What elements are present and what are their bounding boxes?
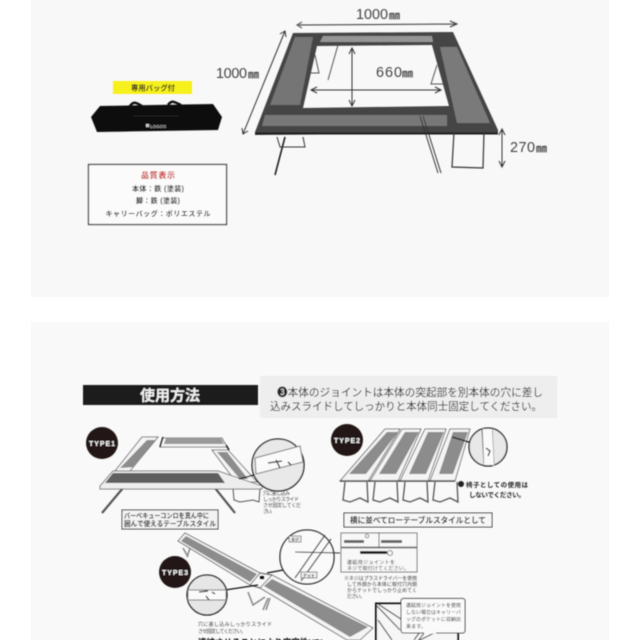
- detail circle: type 1 joint: [239, 439, 304, 491]
- dimension: depth 1000: [216, 31, 286, 134]
- label: bag included: 専用バッグ付: [131, 82, 175, 92]
- illustration: type 1 table: [100, 437, 262, 513]
- dimension: height 270: ㎜: [536, 143, 547, 155]
- note: screw fastening: ※ネジはプラスドライバーを使用: [344, 575, 417, 582]
- note: do not use as chair: 椅子としての使用は: [466, 480, 528, 489]
- note: screw fastening: からナットでしっかり止めてく: [347, 587, 417, 594]
- heading: usage: 使用方法: [140, 386, 200, 404]
- dimension: width 1000: 1000: [356, 7, 388, 23]
- detail circle: type 2 joint: [452, 428, 507, 466]
- icon: carry bag: [91, 102, 222, 132]
- instruction note: ❸本体のジョイントは本体の突起部を別本体の穴に差し: [277, 385, 543, 399]
- dimension: height 270: 270: [510, 140, 535, 156]
- quality label box: [88, 164, 226, 224]
- dimension: opening 660: ㎜: [402, 68, 413, 80]
- callout: storing the joint: しない場合はキャリーバ: [406, 609, 461, 616]
- note: do not use as chair: [458, 480, 528, 499]
- joint parts boxes: [341, 533, 417, 572]
- callout: storing the joint: 連結用ジョイントを使用: [406, 602, 461, 609]
- label: type 1 style: バーベキューコンロを真ん中に: [124, 511, 209, 520]
- label: type 1 style: 囲んで使えるテーブルスタイル: [124, 519, 216, 528]
- badge: TYPE2: TYPE2: [334, 438, 360, 445]
- caption: type 1 joint: しっかりスライド: [263, 496, 299, 503]
- note: screw fastening: ださい。: [347, 593, 365, 600]
- detail circle: type 3 slide joint: [187, 575, 258, 615]
- caption: type 3 joint: [198, 621, 272, 635]
- label: type 2 style: [344, 513, 492, 527]
- caption: type 1 joint: させ固定してくだ: [263, 502, 301, 509]
- dimension: depth 1000: 1000: [216, 66, 247, 82]
- badge: TYPE1: [86, 427, 118, 459]
- dimension: height 270: [499, 129, 547, 167]
- photo frame: bag pocket: [376, 604, 458, 640]
- instruction note: 込みスライドしてしっかりと本体同士固定してください。: [270, 399, 542, 413]
- caption: type 1 joint: さい。: [263, 508, 275, 515]
- caption: type 1 joint: 穴に差し込み: [263, 490, 290, 497]
- dimension: width 1000: ㎜: [389, 10, 400, 22]
- specifications content: [88, 7, 547, 224]
- quality label box: 脚：鉄 (塗装): [136, 196, 180, 205]
- joint parts boxes: ネジで取付けてください。: [347, 565, 409, 572]
- panel: usage: [31, 322, 609, 640]
- note: screw fastening: して外側から本体に取付穴内側: [347, 581, 417, 588]
- dimension: opening 660: 660: [376, 65, 402, 81]
- table photo: [255, 32, 498, 175]
- caption: type 3 joint: 穴に差し込みしっかりスライド: [198, 621, 272, 628]
- dimension: depth 1000: ㎜: [248, 69, 259, 81]
- caption: type 3 joint: させ固定してください。: [198, 628, 246, 635]
- label: bag included: [113, 81, 192, 94]
- note: do not use as chair: しないでください。: [469, 490, 525, 499]
- instruction note: [260, 376, 557, 418]
- heading: usage: [83, 385, 258, 405]
- callout: storing the joint: ッグのポケットに収納出: [406, 616, 461, 623]
- caption: type 1 joint: [263, 490, 301, 515]
- illustration: type 3 linked tables: [178, 533, 373, 640]
- badge: TYPE2: [331, 424, 363, 456]
- badge: TYPE1: TYPE1: [89, 441, 115, 448]
- quality label box: キャリーバッグ：ポリエステル: [106, 209, 210, 218]
- dimension: width 1000: [297, 7, 457, 28]
- callout: storing the joint: [401, 598, 465, 640]
- icon: carry bag: LOGOS: [150, 124, 166, 129]
- detail circle: type 3 screw joint: [267, 530, 340, 584]
- label: type 1 style: [122, 510, 218, 529]
- dimension: opening 660: [311, 48, 441, 106]
- label: type 2 style: 横に並べてローテーブルスタイルとして: [350, 515, 486, 525]
- usage content: [83, 376, 557, 640]
- badge: TYPE3: TYPE3: [162, 570, 188, 577]
- panel: specifications: [31, 0, 609, 297]
- illustration: type 2 slats: [340, 429, 470, 502]
- detail circle: type 3 screw joint: ナット: [303, 572, 315, 578]
- quality label box: 本体：鉄 (塗装): [132, 184, 184, 193]
- quality label box: 品質表示: [141, 170, 175, 180]
- detail circle: type 3 screw joint: ネジ: [291, 536, 299, 542]
- joint parts boxes: 連結用ジョイントを: [347, 559, 395, 566]
- badge: TYPE3: [159, 556, 191, 588]
- note: screw fastening: [344, 575, 417, 600]
- callout: storing the joint: 来ます。: [406, 624, 426, 630]
